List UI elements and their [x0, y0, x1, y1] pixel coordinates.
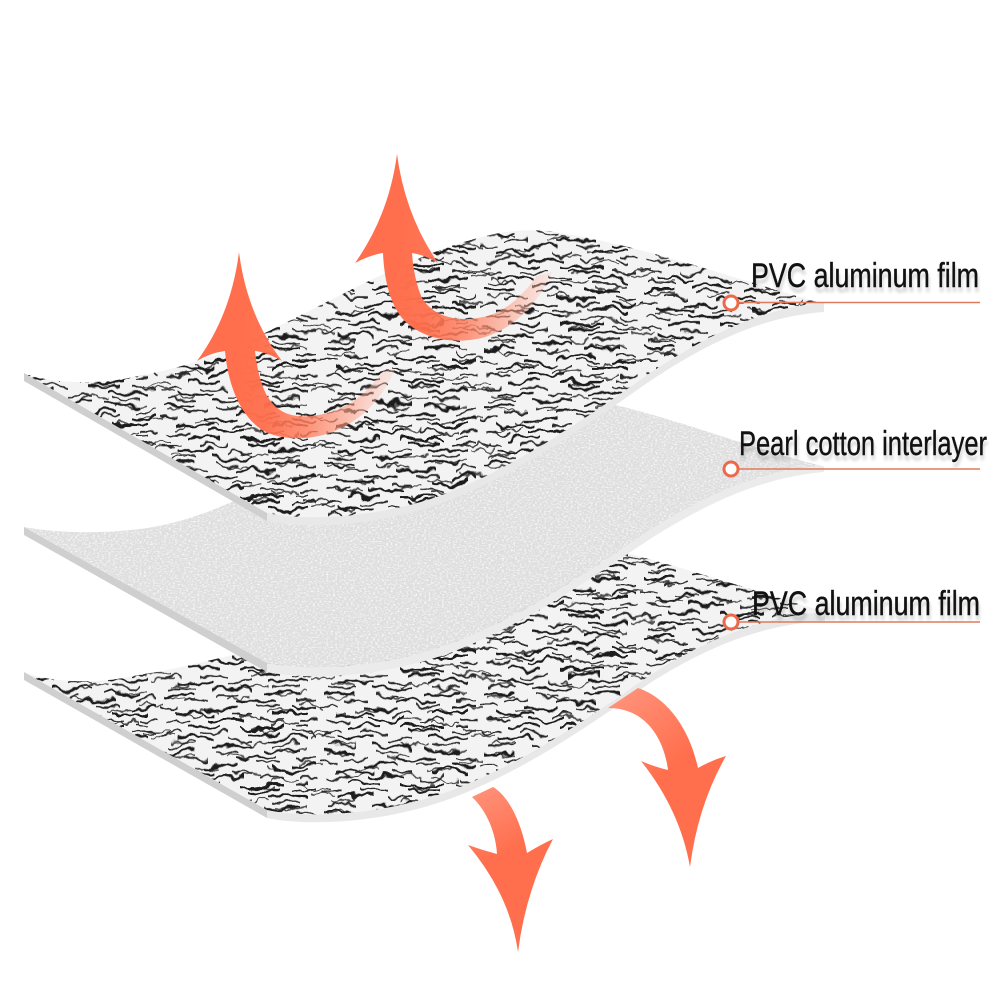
arrow: heat rising left	[197, 252, 395, 438]
arrow: heat falling left	[468, 787, 553, 952]
label: pearl cotton interlayer	[724, 425, 988, 476]
layer: bottom PVC aluminum film	[24, 552, 825, 822]
diagram	[24, 154, 988, 952]
label: top PVC aluminum film	[724, 257, 980, 310]
layer: top PVC aluminum film	[24, 230, 824, 525]
arrow: heat rising right	[355, 154, 552, 341]
layer: pearl cotton interlayer	[24, 405, 824, 676]
arrow: heat falling right	[608, 688, 726, 867]
